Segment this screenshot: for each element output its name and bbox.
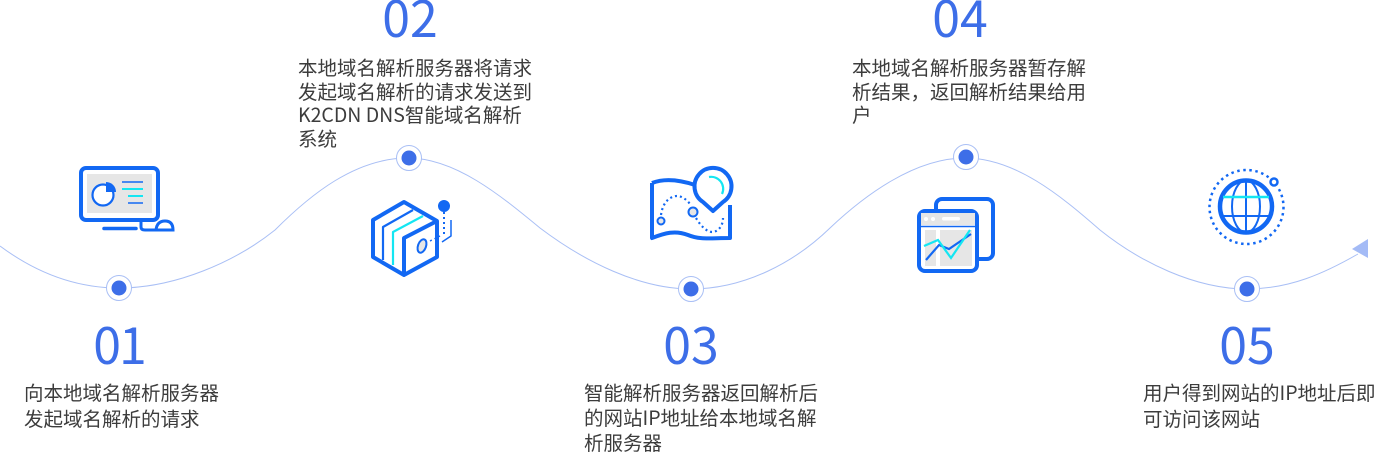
text 02: K2CDN DNS智能域名解析 bbox=[298, 99, 522, 128]
text 05: 用户得到网站的IP地址后即 bbox=[1143, 377, 1375, 406]
icon: globe bbox=[1210, 170, 1284, 244]
node 04 bbox=[954, 144, 978, 170]
text 03: 的网站IP地址给本地域名解 bbox=[584, 402, 817, 431]
text 03: 智能解析服务器返回解析后 bbox=[584, 377, 818, 406]
node 03 bbox=[678, 276, 704, 302]
text 05: 可访问该网站 bbox=[1143, 402, 1260, 432]
text 02: 本地域名解析服务器将请求 bbox=[298, 52, 532, 81]
text 04: 户 bbox=[852, 99, 872, 128]
flow curve bbox=[0, 158, 1358, 289]
icon: map with pin bbox=[652, 168, 732, 238]
text 01: 向本地域名解析服务器 bbox=[24, 377, 219, 406]
icon: server cube bbox=[373, 200, 451, 275]
number 01: 01 bbox=[93, 307, 145, 379]
icon: monitor bbox=[81, 168, 173, 230]
text 04: 本地域名解析服务器暂存解 bbox=[852, 52, 1086, 81]
text 02: 发起域名解析的请求发送到 bbox=[298, 76, 532, 105]
text 01: 发起域名解析的请求 bbox=[24, 402, 200, 432]
text 03: 析服务器 bbox=[584, 427, 662, 456]
icon: chart windows bbox=[919, 199, 993, 271]
text 02 bbox=[298, 52, 532, 152]
text 03 bbox=[584, 377, 818, 456]
arrowhead bbox=[1352, 239, 1368, 258]
text 04 bbox=[852, 52, 1086, 128]
number 05: 05 bbox=[1219, 307, 1275, 379]
text 04: 析结果，返回解析结果给用 bbox=[852, 76, 1086, 105]
node 05 bbox=[1234, 276, 1260, 302]
text 02: 系统 bbox=[298, 123, 337, 152]
number 03: 03 bbox=[663, 307, 719, 379]
text 05 bbox=[1143, 377, 1375, 432]
node 01 bbox=[106, 276, 132, 300]
node 02 bbox=[396, 146, 422, 170]
text 01 bbox=[24, 377, 219, 432]
